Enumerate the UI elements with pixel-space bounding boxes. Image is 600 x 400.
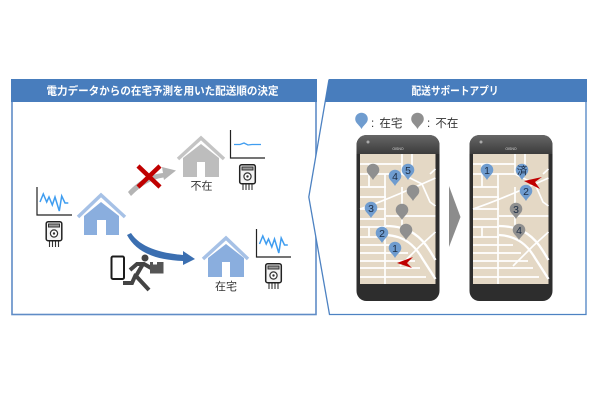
pins: before delivery: 1 <box>392 243 398 255</box>
panel: delivery order decision <box>11 79 317 314</box>
phone: after delivery: OISNO <box>505 147 517 151</box>
arrow: blue route to occupied house <box>127 233 195 265</box>
heading bar: delivery order decision <box>11 79 317 102</box>
pins: after delivery: 1 <box>484 165 490 177</box>
pins: after delivery: 3 <box>513 204 519 216</box>
panel: delivery support app <box>309 79 587 314</box>
label: absent: 不在 <box>190 180 212 192</box>
phone: before delivery: OISNO <box>392 147 404 151</box>
pins: before delivery: 5 <box>405 165 411 177</box>
arrow: transition between phones <box>449 186 460 247</box>
legend: : 在宅 <box>371 117 402 130</box>
legend: : 不在 <box>427 117 458 130</box>
pins: before delivery <box>365 164 419 258</box>
heading bar: delivery support app: 配送サポートアプリ <box>412 84 498 98</box>
legend <box>355 113 458 130</box>
heading bar: delivery support app <box>325 79 587 102</box>
icon: origin smart meter <box>46 222 62 247</box>
map: before delivery <box>360 154 436 284</box>
icon: current position arrow <box>524 177 542 189</box>
icon: occupied house <box>203 238 248 277</box>
icon: absent house <box>178 138 224 177</box>
icon: red cross <box>138 166 160 187</box>
phone: after delivery <box>470 135 552 301</box>
pins: before delivery: 2 <box>379 228 385 240</box>
pins: before delivery: 4 <box>392 171 398 183</box>
chart: absent house power use <box>230 130 265 158</box>
icon: occupied house meter <box>266 264 281 289</box>
phone: before delivery <box>356 135 440 301</box>
icon: current position arrow <box>397 257 413 268</box>
icon: origin house <box>78 195 125 235</box>
map: after delivery <box>473 154 548 284</box>
icon: phone <box>112 256 124 279</box>
heading bar: delivery order decision: 電力データからの在宅予測を用いた配送順の決定 <box>46 84 278 98</box>
pins: after delivery: 2 <box>523 186 529 198</box>
pins: after delivery <box>481 164 532 240</box>
pins: after delivery: 済 <box>517 165 528 177</box>
chart: occupied house power use <box>256 229 291 257</box>
pins: after delivery: 4 <box>516 225 522 237</box>
pins: before delivery: 3 <box>368 203 374 215</box>
arrow: gray route to absent house <box>128 167 176 196</box>
icon: absent house meter <box>240 165 255 190</box>
chart: origin house power use <box>37 187 72 215</box>
label: at home: 在宅 <box>215 280 237 293</box>
icon: delivery runner <box>123 254 164 290</box>
